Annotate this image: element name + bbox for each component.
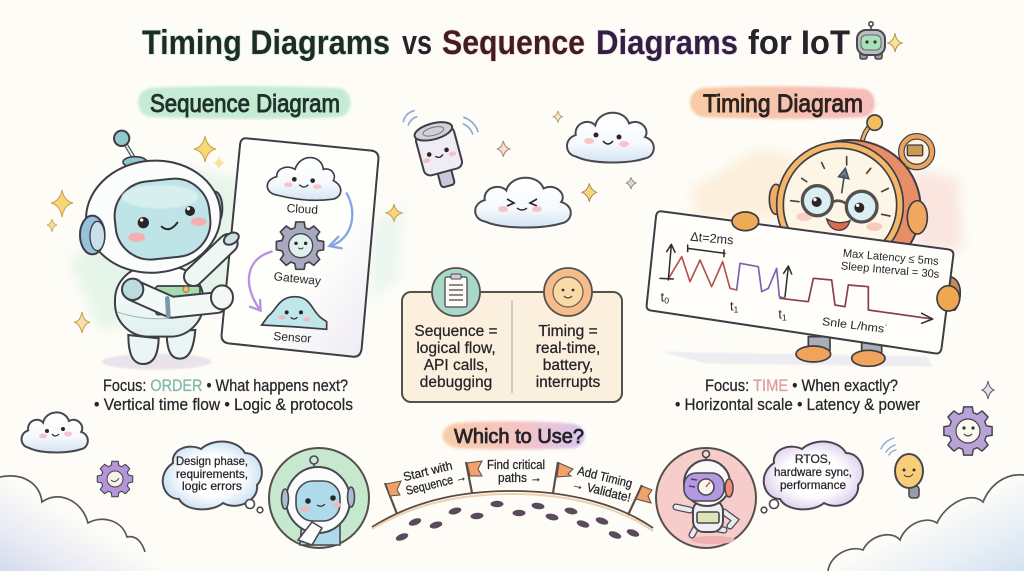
robot body — [115, 267, 203, 337]
cloud node — [267, 158, 341, 200]
step 3 text — [571, 463, 636, 505]
text: timing summary — [536, 323, 601, 391]
step 1 text: Start with — [402, 458, 454, 484]
clock ring — [777, 142, 903, 268]
robot right ear — [208, 192, 222, 225]
signal labels: Sleep Interval = 30s — [840, 260, 940, 281]
panel: sequence board — [222, 138, 378, 357]
signal labels: Snle L/hms˙ — [821, 316, 889, 336]
clock feet — [796, 337, 885, 366]
text: timing summary: interrupts — [536, 374, 601, 391]
thought bubble: sequence — [163, 442, 263, 513]
clock side knobs — [769, 184, 783, 214]
text: timing focus: • Horizontal scale • Latency & power — [675, 395, 920, 414]
flag 3 — [553, 462, 573, 493]
timing board — [647, 211, 953, 354]
robot helmet — [81, 155, 225, 278]
arrow: cloud to gateway — [329, 193, 352, 248]
signal labels: Δt=2ms — [690, 230, 734, 247]
title: vs — [402, 24, 432, 62]
text: sequence summary: API calls, — [424, 357, 488, 374]
clock case — [779, 140, 921, 277]
text: sequence summary: debugging — [420, 374, 492, 391]
robot chest panel — [156, 286, 200, 315]
icon: clipboard — [432, 268, 480, 316]
thought bubble: timing: hardware sync, — [774, 465, 852, 479]
robot antenna — [114, 131, 147, 167]
center scene — [403, 111, 636, 202]
robot raised arm — [193, 230, 241, 277]
sparkle group: left — [47, 136, 402, 333]
text: timing focus — [675, 376, 920, 414]
clock face — [783, 148, 897, 262]
watercolor wash: sequence — [70, 165, 402, 330]
hill path — [372, 491, 653, 542]
cloud outline: bottom left — [0, 476, 145, 552]
cloud: bottom right — [828, 475, 1024, 571]
text: sequence summary — [414, 323, 498, 391]
thought bubble: sequence: logic errors — [182, 479, 242, 493]
circle: thinking robot — [269, 448, 369, 548]
step 1 text: Sequence → — [404, 469, 468, 498]
text: sequence focus: • Vertical time flow • Logic & protocols — [94, 395, 353, 414]
icon: smiling timer — [544, 268, 592, 316]
cloud: bottom left — [0, 476, 165, 571]
thought bubble: timing: RTOS, — [795, 452, 831, 466]
clock right arm — [947, 277, 960, 310]
gear node — [276, 222, 324, 269]
sparkles: center — [497, 111, 636, 202]
cloud: small left — [22, 412, 88, 452]
flag 4 — [628, 485, 652, 515]
robot shadow — [102, 354, 212, 370]
heading: which to use: Which to Use? — [454, 426, 584, 448]
clock mouth — [827, 219, 850, 230]
clock antenna — [862, 115, 882, 145]
flag 2 — [466, 461, 482, 493]
sensor label: Sensor — [273, 329, 312, 346]
icon: sensor device — [413, 118, 467, 191]
text: sequence summary: Sequence = — [414, 323, 498, 340]
robot forward arm — [122, 279, 233, 316]
step 2 text: Find critical — [487, 458, 545, 472]
step 1 text — [401, 456, 468, 498]
cloud label: Cloud — [286, 201, 318, 217]
robot: sequence mascot — [80, 131, 241, 370]
box background — [402, 292, 622, 402]
clock glasses — [802, 186, 877, 222]
cloud: happy center — [567, 113, 654, 163]
signal: zigzag — [660, 244, 933, 323]
thought bubble: sequence: requirements, — [176, 467, 248, 481]
step 2 text — [487, 458, 545, 485]
title — [142, 24, 850, 62]
board hands — [732, 212, 960, 311]
text: sequence summary: logical flow, — [416, 340, 496, 357]
icon: light bulb — [881, 438, 923, 498]
step 2 text: paths → — [498, 471, 542, 485]
text: sequence focus — [94, 376, 353, 414]
heading: timing diagram: Timing Diagram — [703, 90, 863, 118]
ground shadow — [660, 352, 933, 367]
icon: title robot — [857, 22, 885, 59]
text: timing summary: real-time, — [536, 340, 600, 357]
divider — [511, 300, 513, 393]
signal labels: t — [730, 300, 734, 314]
signal labels: t — [661, 291, 664, 305]
thought bubble: sequence: Design phase, — [176, 454, 248, 468]
title: Sequence — [442, 24, 585, 62]
title: for IoT — [748, 24, 850, 62]
sparkle: right — [982, 381, 994, 399]
robot left ear — [80, 216, 105, 254]
text: sequence focus: Focus: ORDER • What happens next? — [103, 376, 348, 395]
gateway label: Gateway — [273, 269, 322, 288]
icon: title sparkle — [888, 33, 902, 52]
step 3 text: Add Timing — [576, 464, 634, 491]
icon: wifi waves — [403, 111, 478, 134]
signal labels: t — [778, 307, 782, 321]
title: Diagrams — [596, 24, 738, 62]
text: timing summary: Timing = — [538, 323, 598, 340]
signal labels — [661, 230, 940, 336]
title: Timing Diagrams — [142, 24, 390, 62]
clock crown — [901, 136, 932, 168]
thought bubble: timing — [761, 442, 863, 513]
icon: small gear — [97, 461, 133, 497]
signal labels: 1 — [782, 312, 787, 322]
robot face screen — [111, 175, 214, 263]
sensor node — [262, 297, 327, 329]
circle: running robot — [656, 448, 756, 548]
mascot: timing clock — [647, 115, 960, 367]
signal labels: 1 — [734, 305, 739, 315]
footprints — [395, 501, 640, 542]
watercolor wash: timing — [690, 148, 962, 250]
arrow: gateway to sensor — [249, 252, 272, 311]
cloud outline: bottom right — [828, 475, 1024, 571]
signal labels: Max Latency ≤ 5ms — [842, 248, 939, 268]
clock right knob — [907, 201, 927, 234]
icon: large gear — [944, 407, 992, 455]
panel: comparison box — [402, 268, 622, 402]
flag 1 — [385, 481, 401, 514]
thought bubble: timing: performance — [780, 478, 846, 492]
text: timing summary: battery, — [543, 357, 593, 374]
step 3 text: → Validate! — [571, 477, 632, 505]
board sheet — [222, 138, 378, 357]
text: timing focus: Focus: TIME • When exactly? — [705, 376, 898, 395]
robot legs — [128, 330, 195, 364]
heading: sequence diagram: Sequence Diagram — [150, 90, 340, 118]
signal labels: 0 — [664, 296, 669, 306]
cloud: grumpy center — [475, 178, 571, 228]
